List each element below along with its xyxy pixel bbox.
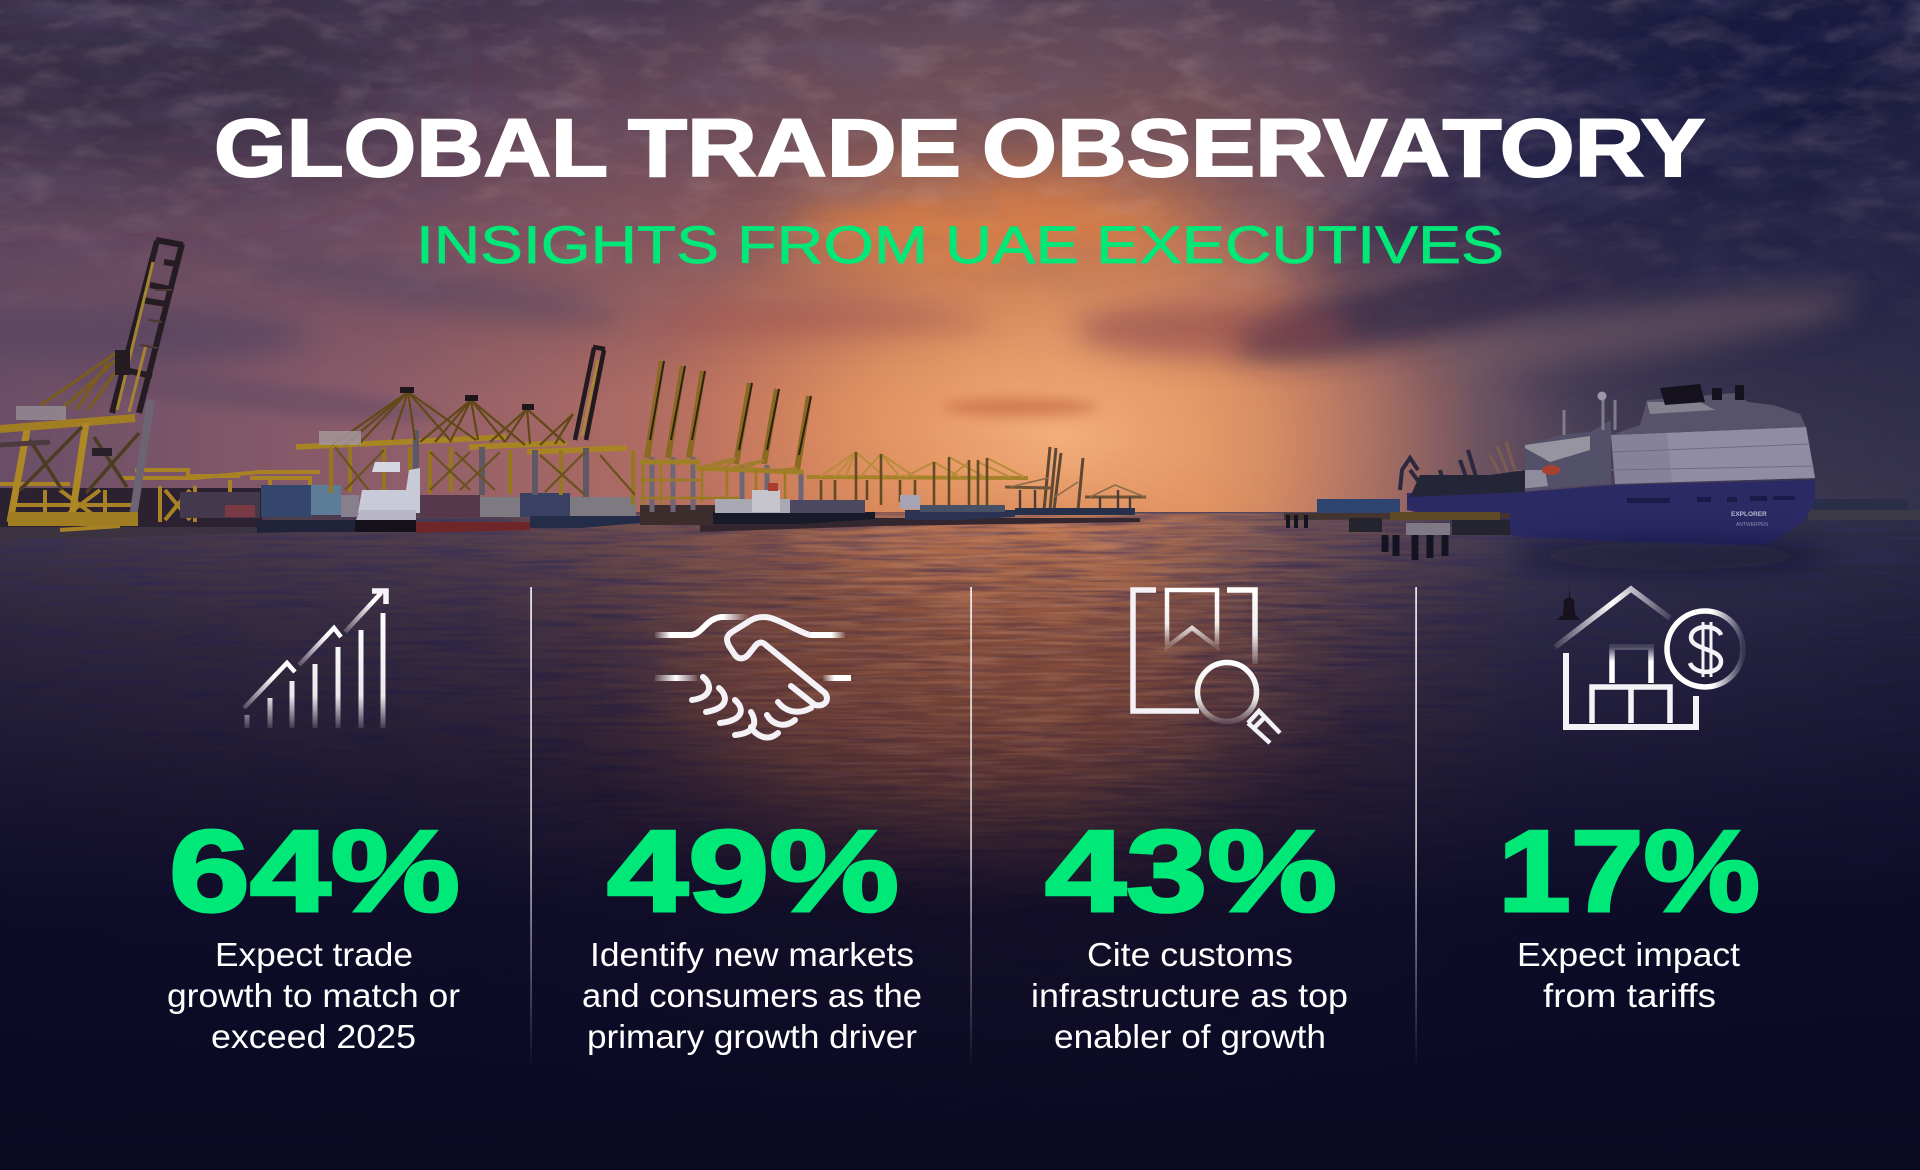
description: and consumers as the bbox=[582, 977, 922, 1014]
icon: document with bookmark and magnifier bbox=[1133, 590, 1280, 743]
white stern block bbox=[1611, 427, 1815, 484]
description: primary growth driver bbox=[587, 1018, 917, 1055]
stern windows bbox=[1627, 496, 1795, 503]
far booms bbox=[640, 361, 811, 512]
icon: rising bar chart with arrow bbox=[244, 591, 386, 728]
name on stern: EXPLORER bbox=[1731, 511, 1767, 518]
water bbox=[0, 488, 1920, 950]
subtitle: INSIGHTS bbox=[416, 216, 719, 275]
description bbox=[1517, 936, 1740, 1014]
icon: buoy bbox=[1556, 583, 1580, 620]
large crane at left bbox=[0, 240, 183, 526]
description bbox=[167, 936, 460, 1055]
jetty bbox=[1284, 513, 1510, 520]
upper decks bbox=[1611, 393, 1806, 435]
stat: 17%: 17% bbox=[1498, 806, 1760, 936]
description: Identify new markets bbox=[590, 936, 914, 973]
panel: 49% new markets bbox=[582, 617, 922, 1055]
stat: 43%: 43% bbox=[1045, 806, 1337, 936]
superstructure bbox=[1525, 420, 1611, 492]
quay and dock base bbox=[0, 526, 262, 540]
description: infrastructure as top bbox=[1031, 977, 1348, 1014]
description bbox=[1031, 936, 1348, 1055]
description: exceed 2025 bbox=[211, 1018, 416, 1055]
subtitle: EXECUTIVES bbox=[1096, 216, 1504, 275]
description: Cite customs bbox=[1087, 936, 1293, 973]
distant vessels bbox=[713, 483, 1920, 524]
main title: GLOBAL bbox=[214, 103, 608, 194]
subtitle bbox=[416, 216, 1504, 275]
description: Expect impact bbox=[1517, 936, 1740, 973]
port cranes and container ships bbox=[0, 240, 1920, 570]
description: Expect trade bbox=[215, 936, 413, 973]
panel: 17% tariffs bbox=[1498, 583, 1760, 1014]
hull reflection bbox=[1510, 542, 1830, 570]
second crane row bbox=[296, 347, 635, 505]
distant cranes bbox=[807, 447, 1146, 510]
far land bbox=[1813, 499, 1908, 510]
main title bbox=[214, 103, 1705, 194]
divider lines bbox=[530, 587, 1417, 1068]
yellow lower structures bbox=[0, 470, 320, 530]
main title: OBSERVATORY bbox=[982, 103, 1705, 194]
right-hand vessel bbox=[1284, 384, 1920, 570]
icon: handshake bbox=[655, 617, 851, 737]
stat: 64%: 64% bbox=[169, 806, 460, 936]
subtitle: FROM bbox=[737, 216, 928, 275]
port of registry on stern: ANTWERPEN bbox=[1736, 522, 1768, 528]
panel: 43% customs infrastructure bbox=[1031, 590, 1348, 1055]
stat: 49%: 49% bbox=[607, 806, 899, 936]
description: from tariffs bbox=[1543, 977, 1716, 1014]
description bbox=[582, 936, 922, 1055]
deck cranes bbox=[1400, 450, 1480, 492]
description: enabler of growth bbox=[1054, 1018, 1326, 1055]
main title: TRADE bbox=[628, 103, 961, 194]
white vessel and hulls bbox=[257, 462, 640, 533]
panel: 64% trade growth bbox=[167, 591, 460, 1055]
subtitle: UAE bbox=[945, 216, 1079, 275]
icon: warehouse with boxes and dollar coin bbox=[1555, 589, 1743, 727]
sky bbox=[0, 0, 1920, 516]
container stacks bbox=[180, 485, 636, 518]
hull bbox=[1407, 480, 1815, 546]
description: growth to match or bbox=[167, 977, 460, 1014]
